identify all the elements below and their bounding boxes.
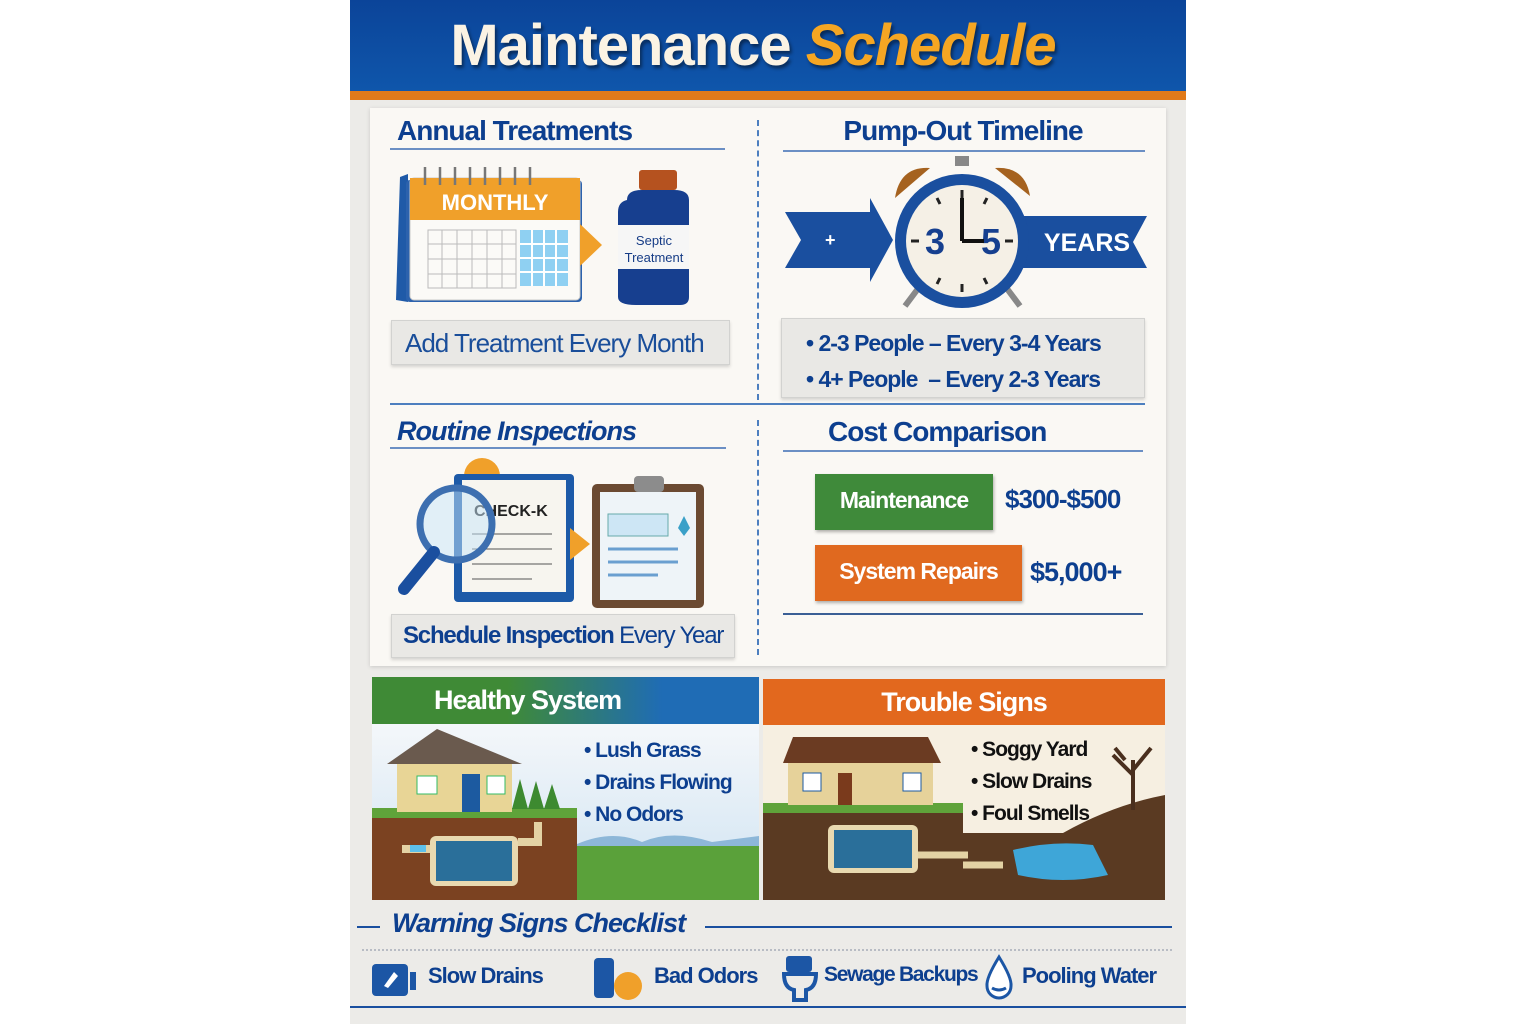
panel: pump-out timeline [780, 115, 1147, 401]
icon: calendar and bottle: Treatment [625, 250, 684, 265]
bar: maintenance cost: $300-$500 [1005, 484, 1120, 514]
item: sewage backups [782, 956, 978, 1002]
checklist row [372, 954, 1157, 1002]
icon: alarm clock with ribbon [785, 156, 1147, 308]
item: bad odors: Bad Odors [654, 963, 757, 988]
header: trouble signs: Trouble Signs [881, 687, 1047, 717]
icon: calendar and bottle: Septic [636, 233, 673, 248]
heading: pump-out: Pump-Out Timeline [843, 115, 1083, 146]
text box: add treatment: Add Treatment Every Month [405, 328, 704, 358]
bar: maintenance cost: Maintenance [840, 487, 968, 513]
icon: alarm clock with ribbon: 5 [981, 221, 1001, 262]
header: trouble signs [763, 679, 1165, 725]
illustration: healthy septic scene [372, 724, 759, 900]
bar: maintenance cost [814, 474, 1120, 534]
heading: annual treatments: Annual Treatments [397, 115, 632, 146]
icon: checklist, magnifier and clipboard [398, 458, 704, 608]
bar: system repairs cost: $5,000+ [1030, 557, 1121, 587]
icon: alarm clock with ribbon: 3 [925, 221, 945, 262]
panel: trouble signs [763, 679, 1165, 900]
panel: healthy system [372, 677, 759, 900]
bullets: trouble signs: • Soggy Yard [971, 738, 1087, 761]
bar: system repairs cost [814, 545, 1122, 605]
bullets: healthy signs: • Lush Grass [584, 739, 701, 762]
item: sewage backups: Sewage Backups [824, 963, 977, 986]
heading: routine inspections: Routine Inspections [397, 416, 636, 446]
text box: schedule inspection [391, 614, 735, 658]
header: healthy system: Healthy System [434, 685, 621, 715]
header banner [350, 0, 1186, 100]
text box: add treatment [391, 320, 730, 365]
poster background [350, 0, 1186, 1024]
panel: annual treatments [390, 115, 731, 368]
icon: checklist, magnifier and clipboard: CHECK-K [474, 503, 548, 520]
item: pooling water [985, 954, 1157, 1000]
icon: alarm clock with ribbon: + [825, 230, 836, 250]
text box: pump-out frequencies [781, 318, 1145, 398]
bar: system repairs cost: System Repairs [839, 558, 998, 584]
bullets: healthy signs: • No Odors [584, 803, 683, 826]
illustration: failing septic scene [763, 725, 1165, 900]
item: slow drains: Slow Drains [428, 963, 543, 988]
icon: calendar and bottle: MONTHLY [442, 190, 549, 215]
bullets: healthy signs: • Drains Flowing [584, 771, 732, 794]
item: bad odors [594, 958, 758, 1000]
bullets: trouble signs [971, 738, 1092, 825]
panel: routine inspections [390, 416, 736, 661]
text box: schedule inspection: Schedule Inspection Every Year [403, 622, 723, 649]
bullets: trouble signs: • Slow Drains [971, 770, 1091, 793]
text box: pump-out frequencies: • 4+ People – Every 2-3 Years [806, 366, 1100, 392]
item: pooling water: Pooling Water [1022, 963, 1156, 988]
text box: pump-out frequencies: • 2-3 People – Every 3-4 Years [806, 330, 1101, 356]
heading: cost comparison: Cost Comparison [828, 416, 1046, 447]
icon: alarm clock with ribbon: YEARS [1044, 229, 1130, 257]
panel: cost comparison [783, 416, 1143, 615]
bullets: healthy signs [584, 739, 732, 826]
icon: calendar and bottle [396, 167, 689, 305]
item: slow drains [372, 963, 543, 996]
title: Maintenance Schedule [450, 13, 1056, 78]
bullets: trouble signs: • Foul Smells [971, 802, 1089, 825]
header: healthy system [372, 677, 759, 724]
main card [370, 108, 1166, 666]
heading: warning signs checklist: Warning Signs Checklist [392, 908, 685, 938]
